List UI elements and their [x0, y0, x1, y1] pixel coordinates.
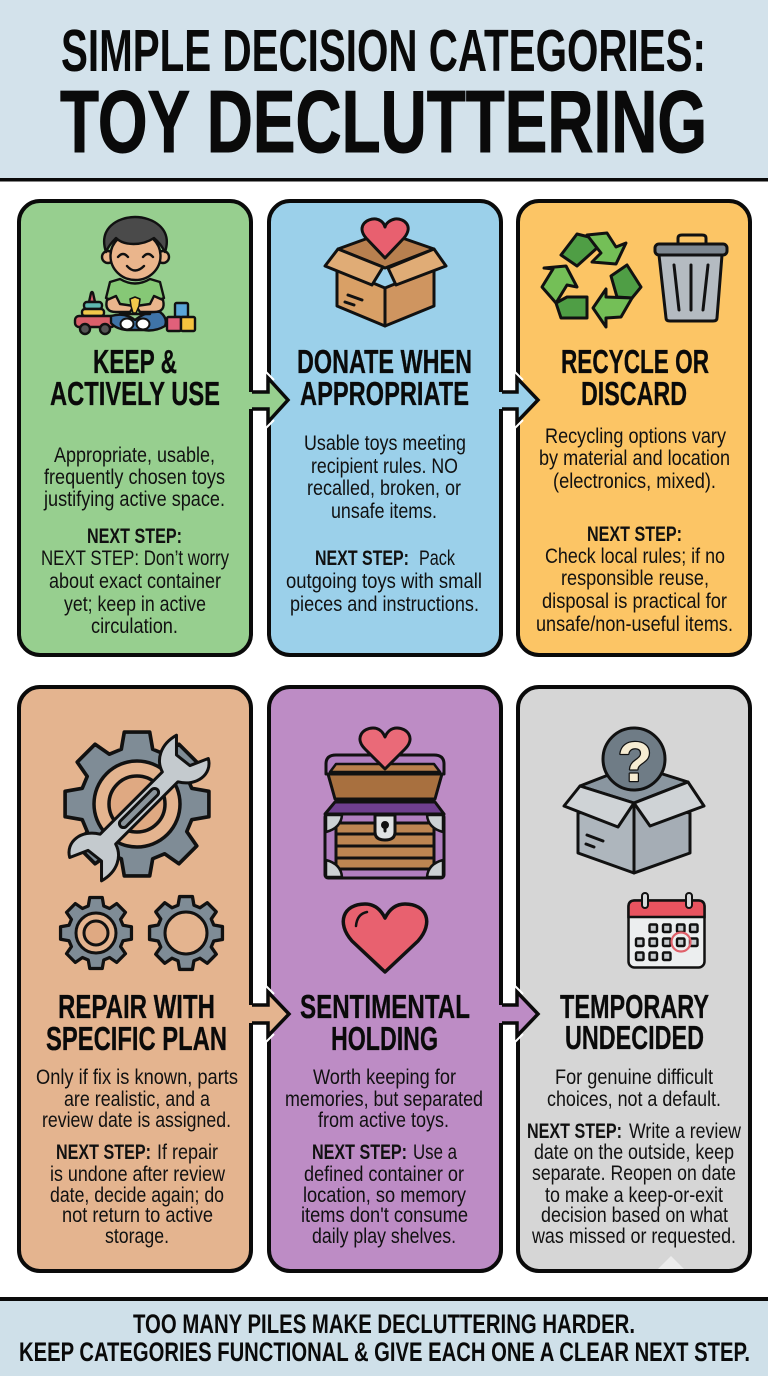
- next step text: separate. Reopen on date: [532, 1162, 736, 1185]
- heading: [297, 343, 472, 412]
- next step text: NEXT STEP:: [312, 1141, 407, 1164]
- description text: Worth keeping for: [313, 1066, 456, 1089]
- panel: donate when appropriate: [269, 201, 501, 655]
- footer banner: [0, 1297, 768, 1376]
- icon: box with question mark: [564, 728, 704, 873]
- icon: child playing with toys: [75, 217, 195, 334]
- icon: gear and wrench: [61, 730, 217, 886]
- heading: [561, 343, 709, 412]
- icon: calendar: [628, 893, 704, 968]
- next step text: NEXT STEP: Don’t worry: [41, 547, 229, 570]
- description text: choices, not a default.: [547, 1088, 721, 1111]
- heading: APPROPRIATE: [300, 375, 469, 412]
- next step text: NEXT STEP:: [56, 1141, 151, 1164]
- next step text: yet; keep in active: [64, 593, 206, 616]
- description text: (electronics, mixed).: [553, 470, 716, 493]
- icon: small gear left: [61, 898, 131, 968]
- next step text: [41, 525, 229, 638]
- next step text: NEXT STEP:: [587, 523, 682, 546]
- panel: repair with specific plan: [19, 687, 251, 1271]
- next step text: about exact container: [49, 570, 221, 593]
- next step text: to make a keep-or-exit: [545, 1184, 723, 1207]
- description text: justifying active space.: [43, 488, 225, 511]
- arrow: sentimental to temporary: [499, 986, 538, 1042]
- description text: Usable toys meeting: [304, 432, 466, 455]
- next step text: date, decide again; do: [50, 1184, 224, 1207]
- description text: For genuine difficult: [555, 1066, 713, 1089]
- icon: open box with heart: [325, 219, 446, 326]
- description text: memories, but separated: [285, 1088, 483, 1111]
- description text: [547, 1066, 721, 1111]
- next step text: decision based on what: [541, 1204, 728, 1227]
- next step text: unsafe/non-useful items.: [536, 613, 733, 636]
- next step text: circulation.: [91, 615, 178, 638]
- arrow: donate to recycle: [499, 372, 538, 428]
- description text: Only if fix is known, parts: [36, 1066, 238, 1089]
- next step text: items don't consume: [301, 1204, 468, 1227]
- icon: recycling symbol: [542, 233, 641, 327]
- next step text: [286, 547, 482, 616]
- next step text: [50, 1141, 226, 1248]
- next step text: responsible reuse,: [561, 567, 709, 590]
- heading: KEEP &: [93, 343, 177, 380]
- description text: review date is assigned.: [42, 1109, 231, 1132]
- next step text: outgoing toys with small: [286, 570, 482, 593]
- next step text: [536, 523, 733, 636]
- description text: by material and location: [539, 447, 730, 470]
- next step text: Use a: [413, 1141, 457, 1164]
- next step text: disposal is practical for: [542, 590, 727, 613]
- next step text: NEXT STEP:: [87, 525, 182, 548]
- next step text: Write a review: [629, 1120, 742, 1143]
- heading: UNDECIDED: [565, 1019, 704, 1056]
- heading: SPECIFIC PLAN: [46, 1020, 227, 1057]
- next step text: not return to active: [62, 1204, 213, 1227]
- icon: big heart: [343, 904, 427, 972]
- description text: recipient rules. NO: [311, 455, 458, 478]
- description text: [304, 432, 466, 523]
- description text: [43, 444, 225, 511]
- heading: [560, 988, 709, 1056]
- description text: [36, 1066, 238, 1132]
- arrow: keep to donate: [249, 372, 288, 428]
- header banner: [0, 0, 768, 182]
- heading: SENTIMENTAL: [300, 988, 470, 1025]
- next step text: is undone after review: [50, 1163, 226, 1186]
- next step text: [527, 1120, 742, 1248]
- panel: recycle or discard: [518, 201, 750, 655]
- next step text: NEXT STEP:: [315, 547, 409, 570]
- arrow: repair to sentimental: [249, 986, 289, 1042]
- next step text: defined container or: [304, 1163, 464, 1186]
- next step text: NEXT STEP:: [527, 1120, 622, 1143]
- description text: are realistic, and a: [64, 1088, 210, 1111]
- description text: from active toys.: [318, 1109, 449, 1132]
- next step text: storage.: [105, 1225, 169, 1248]
- next step text: [301, 1141, 468, 1248]
- next step text: date on the outside, keep: [534, 1141, 734, 1164]
- panel: temporary undecided: [518, 687, 750, 1271]
- next step text: was missed or requested.: [531, 1225, 736, 1248]
- next step text: pieces and instructions.: [290, 593, 479, 616]
- description text: Recycling options vary: [545, 425, 726, 448]
- next step text: Pack: [419, 547, 455, 570]
- heading: ACTIVELY USE: [50, 375, 220, 412]
- icon: box with question mark: ?: [618, 730, 652, 793]
- panel: sentimental holding: [269, 687, 501, 1271]
- description text: Appropriate, usable,: [54, 444, 215, 467]
- footer text: [19, 1309, 750, 1367]
- heading: TEMPORARY: [560, 988, 709, 1025]
- next step text: Check local rules; if no: [545, 545, 725, 568]
- heading: DONATE WHEN: [297, 343, 472, 380]
- description text: [285, 1066, 483, 1132]
- description text: unsafe items.: [331, 500, 437, 523]
- description text: recalled, broken, or: [307, 477, 461, 500]
- description text: frequently chosen toys: [44, 466, 225, 489]
- icon: treasure chest with heart: [325, 728, 444, 878]
- icon: small gear right: [150, 897, 222, 969]
- heading: REPAIR WITH: [58, 988, 215, 1025]
- description text: [539, 425, 730, 493]
- panel: keep and actively use: [19, 201, 251, 655]
- heading: [50, 343, 220, 412]
- next step text: daily play shelves.: [312, 1225, 456, 1248]
- heading: [46, 988, 227, 1057]
- next step text: If repair: [157, 1141, 218, 1164]
- heading: HOLDING: [331, 1020, 438, 1057]
- heading: DISCARD: [581, 375, 687, 412]
- heading: [300, 988, 470, 1057]
- next step text: location, so memory: [303, 1184, 466, 1207]
- icon: trash can: [655, 235, 727, 321]
